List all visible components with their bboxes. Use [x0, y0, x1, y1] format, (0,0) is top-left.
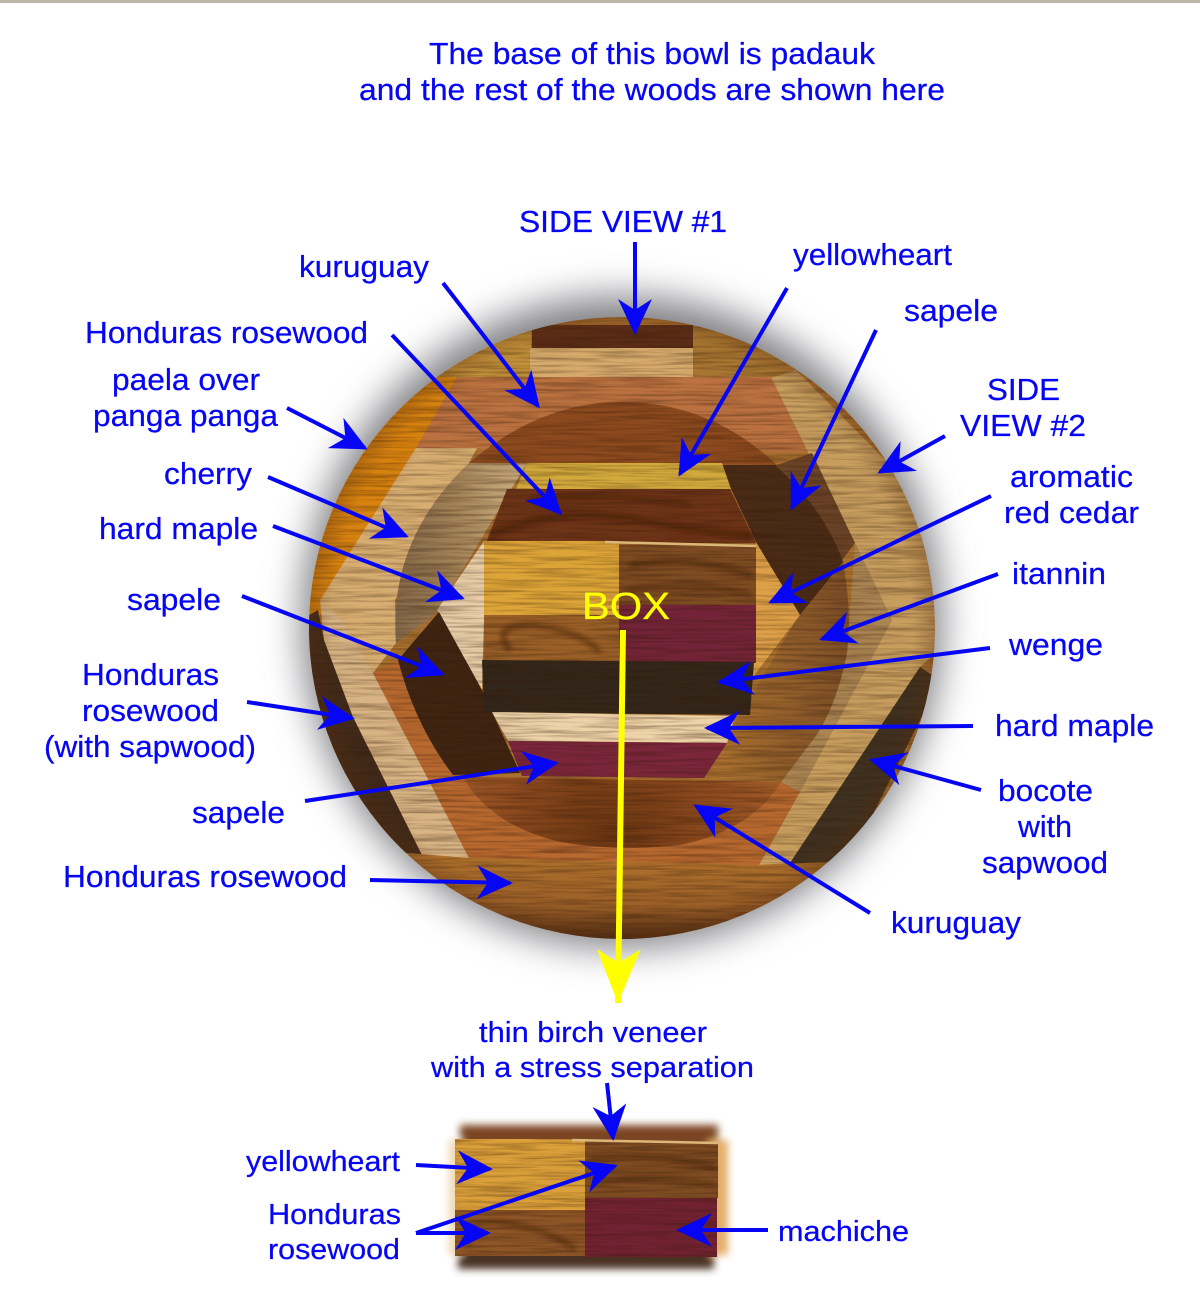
outer itannin lighter: [781, 543, 892, 792]
bowl photo: [300, 310, 950, 950]
bowl labels: Honduras rosewood: [63, 860, 347, 894]
hard maple inner: [437, 541, 484, 690]
bowl drop shadow: [302, 296, 942, 948]
bowl labels: SIDE VIEW #1: [519, 205, 727, 239]
right outer rim wood: [759, 370, 950, 865]
kuruguay lower band: [373, 660, 800, 865]
bowl labels: aromatic: [1010, 460, 1133, 494]
rosewood block left: [455, 1210, 585, 1256]
arrows on bowl: [242, 242, 998, 913]
bowl labels: yellowheart: [793, 238, 953, 272]
bowl labels: kuruguay: [299, 250, 430, 284]
rosewood figure streaks: [490, 496, 752, 652]
yellow arrow: [618, 630, 623, 1003]
top edge band: [0, 0, 1200, 3]
kuruguay bottom dark: [463, 777, 781, 848]
side view 1 light strip: [530, 348, 693, 377]
bowl labels: rosewood: [82, 694, 219, 728]
itannin: [744, 562, 849, 782]
title: The base of this bowl is padauk: [429, 37, 876, 71]
title: [359, 37, 945, 107]
box photo: [449, 1125, 728, 1269]
bowl labels: sapele: [127, 583, 221, 617]
bowl labels: kuruguay: [891, 906, 1022, 940]
bowl labels: sapwood: [982, 846, 1108, 880]
box labels: with a stress separation: [430, 1052, 754, 1084]
bowl labels: hard maple: [99, 512, 258, 546]
bowl labels: (with sapwood): [44, 730, 256, 764]
bowl labels: with: [1017, 810, 1072, 844]
grey inner piece: [395, 463, 527, 643]
orange paela wood: [309, 377, 457, 616]
sapele lower left: [398, 612, 520, 775]
wenge: [482, 660, 754, 715]
box labels: yellowheart: [246, 1146, 400, 1178]
box purple: [619, 605, 756, 663]
box rosewood streaks: [466, 1156, 716, 1250]
bowl labels: sapele: [192, 796, 285, 830]
birch veneer line: [605, 542, 756, 546]
side view 1 dark strip: [532, 325, 693, 348]
cherry band: [320, 448, 477, 673]
box soft surround: [449, 1125, 728, 1269]
rim shading: [309, 317, 935, 939]
kuruguay top band: [416, 377, 808, 452]
bowl labels: panga panga: [93, 399, 278, 433]
box arrows: [416, 1083, 768, 1233]
bowl labels: VIEW #2: [960, 409, 1086, 443]
machiche block: [585, 1198, 717, 1257]
bowl labels: [44, 205, 1154, 940]
title: and the rest of the woods are shown here: [359, 73, 945, 107]
birch veneer: [572, 1140, 718, 1143]
sapele upper right outer: [720, 453, 855, 615]
bowl labels: paela over: [112, 363, 260, 397]
box labels: thin birch veneer: [479, 1017, 707, 1049]
sapele upper right inner: [720, 465, 843, 615]
pale sapwood left: [320, 600, 469, 858]
rosewood block right: [585, 1143, 718, 1198]
bowl labels: hard maple: [995, 709, 1154, 743]
bowl labels: bocote: [998, 774, 1093, 808]
aromatic red cedar: [753, 542, 800, 677]
golden top-left rim: [438, 330, 532, 377]
purple strip: [508, 741, 727, 778]
bowl labels: wenge: [1008, 628, 1103, 662]
hard maple strip: [492, 712, 735, 743]
brown top-right rim: [693, 315, 810, 378]
rosewood strip: [486, 489, 756, 543]
honduras rosewood bottom: [406, 853, 828, 939]
box rosewood left: [484, 615, 619, 661]
box labels: machiche: [778, 1216, 909, 1248]
bowl labels: Honduras: [82, 658, 219, 692]
kuruguay top dark arc: [469, 402, 777, 465]
bowl labels: sapele: [904, 294, 998, 328]
yellowheart block: [455, 1139, 585, 1210]
bowl labels: itannin: [1012, 557, 1106, 591]
box labels: [246, 1017, 909, 1266]
bowl labels: SIDE: [987, 373, 1060, 407]
box labels: rosewood: [268, 1234, 400, 1266]
yellowheart strip: [516, 463, 731, 489]
dark sapwood edge left: [309, 610, 422, 854]
bowl labels: Honduras rosewood: [85, 316, 368, 350]
box yellowheart: [484, 541, 619, 615]
bowl base: [319, 317, 934, 865]
bowl labels: red cedar: [1004, 496, 1139, 530]
box labels: Honduras: [268, 1199, 401, 1231]
bocote dark: [790, 667, 932, 864]
BOX label: BOX: [582, 586, 670, 628]
bowl labels: cherry: [164, 457, 253, 491]
box rosewood right: [619, 545, 756, 605]
